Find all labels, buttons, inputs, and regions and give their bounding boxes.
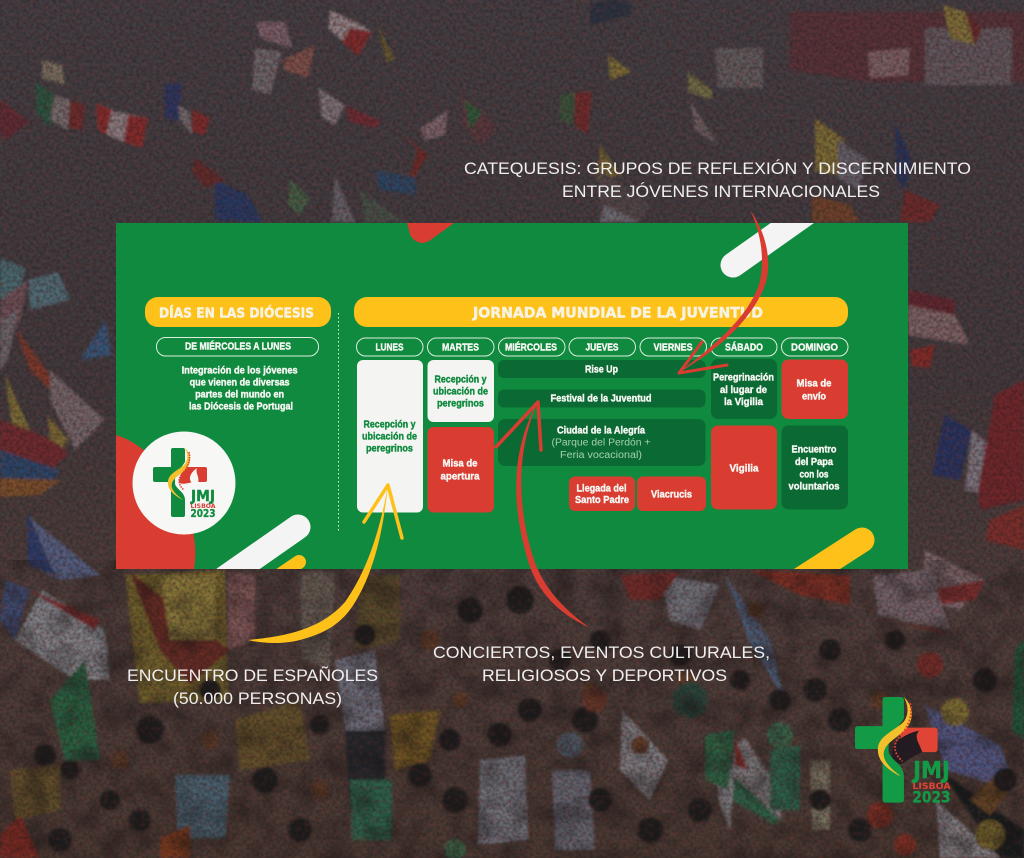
card: ciudad de la alegría: Feria vocacional) (560, 450, 642, 461)
icon: JMJ logo bottom right: 2023 (912, 788, 951, 807)
card: misa de envío: envío (802, 392, 826, 402)
text block: description: Integración de los jóvenes (182, 366, 298, 376)
panel: jornada mundial de la juventud (354, 297, 848, 512)
icon: JMJ logo in white circle: LISBOA (190, 504, 216, 510)
card: llegada del santo padre: Santo Padre (575, 495, 629, 506)
card: lunes recepción (357, 360, 423, 512)
top-right banner (790, 12, 1024, 82)
card: ciudad de la alegría: Ciudad de la Alegría (557, 426, 645, 436)
text block: description: partes del mundo en (195, 390, 284, 400)
icon: JMJ logo bottom right: LISBOA (912, 782, 951, 792)
day headers: SÁBADO (725, 340, 763, 354)
card: festival de la juventud (498, 390, 706, 408)
card: ciudad de la alegría (498, 419, 706, 466)
card: lunes recepción: Recepción y (364, 420, 416, 430)
card: encuentro del papa (782, 426, 848, 510)
card: encuentro del papa: con los (800, 470, 829, 480)
card: peregrinación: Peregrinación (713, 372, 774, 384)
right side flags (908, 290, 970, 345)
card: encuentro del papa: Encuentro (792, 444, 836, 456)
top-center-right flags (597, 145, 622, 180)
callout: encuentro de españoles: (50.000 PERSONAS) (173, 690, 342, 708)
card: misa de apertura: Misa de (442, 458, 478, 470)
day headers: MIÉRCOLES (505, 340, 557, 354)
card: peregrinación: la Vigilia (724, 397, 763, 408)
card: llegada del santo padre: Llegada del (576, 484, 627, 494)
icon: JMJ logo bottom right: JMJ (911, 758, 950, 784)
text block: description: las Diócesis de Portugal (189, 402, 293, 412)
arrow: yellow to lunes (248, 485, 402, 643)
card: encuentro del papa: del Papa (795, 457, 833, 468)
card: martes recepción: ubicación de (433, 386, 488, 398)
callout: catequesis: ENTRE JÓVENES INTERNACIONALES (562, 182, 880, 201)
arrow: red to festival (496, 402, 590, 628)
day headers: MARTES (442, 342, 479, 354)
day headers: JUEVES (586, 342, 619, 354)
card: misa de apertura: apertura (440, 472, 480, 482)
card: ciudad de la alegría: (Parque del Perdón + (552, 438, 651, 448)
card: lunes recepción: ubicación de (362, 432, 417, 442)
people in lower band (335, 650, 385, 730)
icon: JMJ logo bottom right (855, 697, 951, 807)
card: encuentro del papa: voluntarios (788, 482, 840, 492)
callout: conciertos: RELIGIOSOS Y DEPORTIVOS (482, 667, 727, 685)
card: peregrinación (711, 359, 777, 419)
callout: catequesis: CATEQUESIS: GRUPOS DE REFLEXIÓN Y DISCERNIMIENTO (464, 159, 971, 178)
callout: conciertos: CONCIERTOS, EVENTOS CULTURALES, (433, 644, 770, 662)
card: viacrucis (637, 476, 706, 511)
card: llegada del santo padre (569, 476, 635, 511)
day headers (356, 338, 848, 356)
lower-left flags (125, 570, 228, 703)
heading: días en las diócesis (145, 297, 331, 327)
icon: JMJ logo in white circle: JMJ (190, 487, 215, 505)
card: misa de apertura (428, 427, 494, 512)
card: rise up (498, 360, 706, 378)
card: festival de la juventud: Festival de la Juventud (550, 394, 652, 404)
icon: JMJ logo in white circle: 2023 (190, 508, 216, 520)
left side flags (0, 258, 25, 300)
card: vigilia (711, 426, 777, 510)
card: rise up: Rise Up (585, 364, 618, 376)
day headers: DOMINGO (791, 342, 838, 354)
heads (34, 586, 1017, 852)
date pill: de miércoles a lunes: DE MIÉRCOLES A LUNES (185, 340, 291, 352)
card: martes recepción: Recepción y (434, 374, 487, 386)
card: vigilia: Vigilia (730, 464, 759, 474)
card: martes recepción: peregrinos (437, 398, 484, 410)
panel: programme schedule (116, 202, 908, 580)
text block: description: que vienen de diversas (190, 378, 290, 388)
card: lunes recepción: peregrinos (366, 444, 413, 454)
icon: JMJ logo in white circle (132, 432, 236, 534)
heading: jornada mundial de la juventud: JORNADA MUNDIAL DE LA JUVENTUD (472, 306, 763, 322)
card: viacrucis: Viacrucis (651, 490, 692, 500)
callout: encuentro de españoles: ENCUENTRO DE ESPAÑOLES (127, 665, 378, 685)
date pill: de miércoles a lunes (156, 338, 318, 356)
heading: jornada mundial de la juventud (354, 297, 848, 327)
card: misa de envío (782, 360, 848, 419)
card: misa de envío: Misa de (796, 378, 832, 390)
panel: días en las diócesis (132, 297, 331, 534)
card: peregrinación: al lugar de (720, 385, 767, 396)
day headers: LUNES (376, 342, 404, 354)
card: martes recepción (428, 360, 494, 422)
day headers: VIERNES (654, 342, 693, 354)
heading: días en las diócesis: DÍAS EN LAS DIÓCESIS (159, 304, 314, 322)
arrow: red to rise up (678, 210, 768, 373)
top-left flags (256, 22, 292, 48)
